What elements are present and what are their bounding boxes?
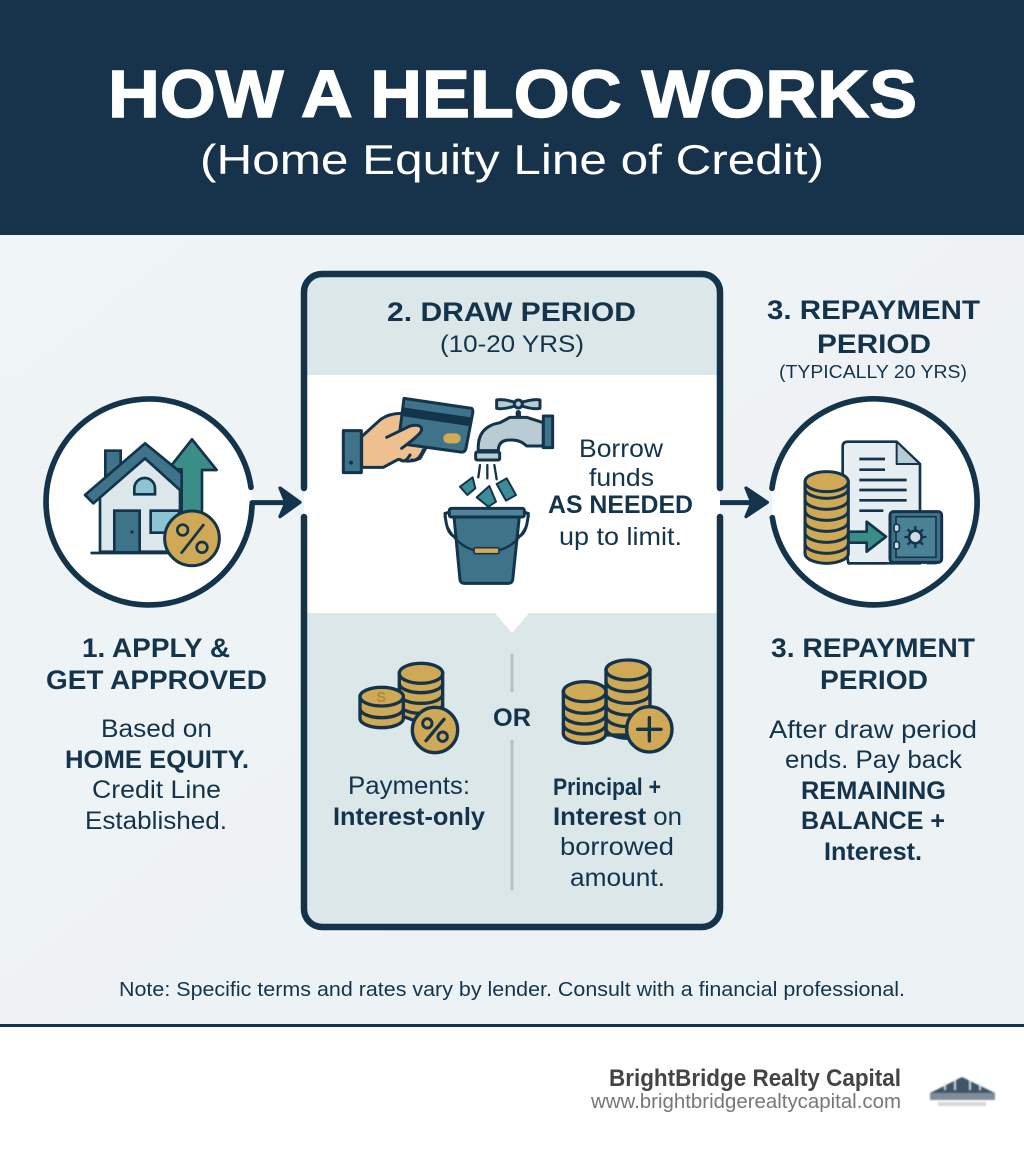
panel: step 3 repayment period [720, 295, 981, 866]
subtitle: (Home Equity Line of Credit) [200, 136, 824, 183]
step 3 description: REMAINING [801, 777, 946, 805]
step 3 description: BALANCE + [801, 807, 945, 835]
payment option: principal and interest: Principal + [553, 774, 661, 801]
step 3 top heading [767, 295, 981, 359]
website: www.brightbridgerealtycapital.com [590, 1091, 901, 1113]
step 2 duration: (10-20 YRS) [440, 331, 584, 358]
step 3 duration: (TYPICALLY 20 YRS) [779, 362, 967, 382]
icon: coins, document, arrow and safe [720, 399, 977, 605]
icon: hand with card, faucet and bucket [343, 398, 553, 583]
step 1 heading: 1. APPLY & [82, 633, 230, 663]
payment option: principal and interest [553, 774, 682, 892]
borrow text [548, 435, 693, 551]
panel: step 1 apply and get approved [46, 399, 300, 835]
payment option: principal and interest: borrowed [560, 833, 674, 861]
payment option: principal and interest: amount. [570, 864, 665, 892]
icon: coins with plus badge [563, 660, 672, 752]
step 1 description [65, 715, 249, 835]
step 3 description [769, 716, 977, 866]
borrow text: Borrow [579, 435, 664, 463]
borrow text: funds [589, 464, 654, 492]
page background [0, 235, 1024, 1025]
title: HOW A HELOC WORKS [108, 57, 917, 132]
divider [510, 654, 514, 890]
step 1 description: Credit Line [92, 776, 221, 804]
payment option: interest only: Interest-only [333, 803, 485, 831]
step 3 lower heading: 3. REPAYMENT [771, 633, 976, 663]
step 3 description: Interest. [824, 838, 922, 866]
step 1 description: Based on [101, 715, 212, 743]
or label: OR [493, 704, 531, 732]
step 3 lower heading: PERIOD [820, 665, 928, 695]
icon: company logo [930, 1077, 995, 1106]
borrow text: AS NEEDED [548, 491, 693, 519]
step 3 lower heading [771, 633, 976, 695]
note: Note: Specific terms and rates vary by lender. Consult with a financial professional. [119, 979, 905, 1001]
panel: step 2 draw period [304, 274, 720, 927]
step 3 top heading: PERIOD [817, 329, 931, 359]
step 2 heading: 2. DRAW PERIOD [387, 297, 636, 327]
icon: coins with percent badge: S [376, 690, 386, 706]
icon: coins with percent badge [360, 663, 458, 753]
step 1 description: HOME EQUITY. [65, 746, 249, 774]
payment option: interest only [333, 772, 485, 831]
icon: house with rising arrow and percent badge [46, 399, 300, 605]
step 1 heading [46, 633, 267, 695]
borrow text: up to limit. [559, 523, 682, 551]
company name: BrightBridge Realty Capital [609, 1065, 901, 1092]
payment option: interest only: Payments: [348, 772, 470, 800]
step 1 description: Established. [85, 807, 227, 835]
step 3 description: After draw period [769, 716, 977, 744]
step 1 heading: GET APPROVED [46, 665, 267, 695]
payment option: principal and interest: Interest on [553, 803, 682, 831]
header banner [0, 0, 1024, 235]
footer [0, 1024, 1024, 1154]
step 3 top heading: 3. REPAYMENT [767, 295, 981, 325]
step 3 description: ends. Pay back [785, 746, 963, 774]
